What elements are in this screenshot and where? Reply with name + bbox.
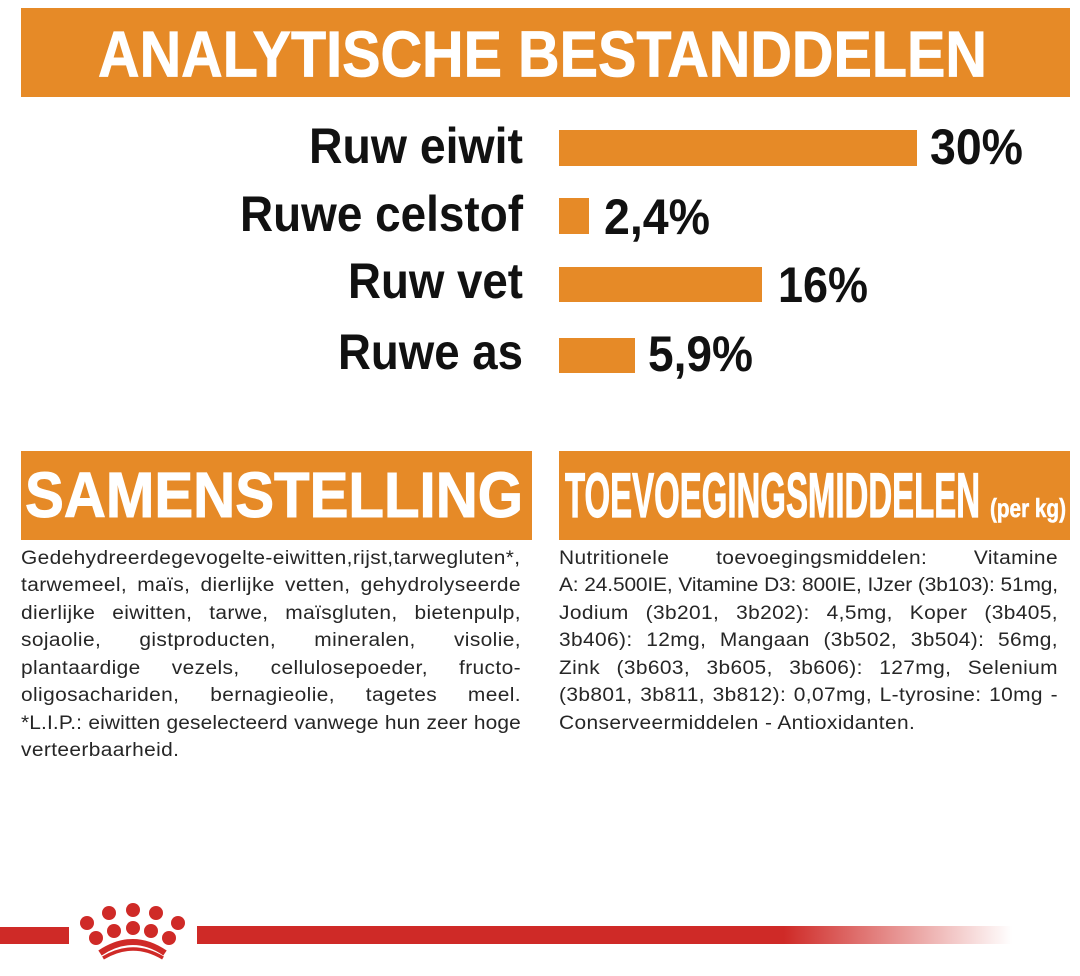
text block: additives: (3b801, 3b811, 3b812): 0,07mg, L-tyrosine: 10mg - — [559, 685, 1058, 706]
text block: composition: oligosachariden, bernagieolie, tagetes meel. — [21, 685, 521, 706]
text block: composition — [21, 548, 521, 761]
footer red line: right, fading out — [197, 926, 1012, 944]
text block: composition: tarwemeel, maïs, dierlijke vetten, gehydrolyseerde — [21, 575, 521, 596]
row: Ruwe celstof 2,4%: 2,4% — [604, 189, 710, 245]
heading: Samenstelling: SAMENSTELLING — [25, 459, 523, 531]
row: Ruwe as 5,9% — [338, 324, 753, 382]
text block: composition: Gedehydreerdegevogelte-eiwitten,rijst,tarwegluten*, — [21, 548, 520, 569]
text block: additives: Nutritionele toevoegingsmiddelen: Vitamine — [559, 548, 1058, 569]
row: Ruw eiwit 30%: Ruw eiwit — [309, 118, 523, 174]
row: Ruwe celstof 2,4% — [240, 186, 710, 245]
text block: composition: sojaolie, gistproducten, mineralen, visolie, — [21, 630, 521, 651]
text block: additives: Conserveermiddelen - Antioxidanten. — [559, 713, 915, 734]
bar chart: analytical constituents — [240, 118, 1023, 382]
text block: additives: 3b406): 12mg, Mangaan (3b502, 3b504): 56mg, — [559, 630, 1058, 651]
title banner: ANALYTISCHE BESTANDDELEN — [98, 18, 987, 90]
row: Ruw vet 16%: 16% — [778, 257, 868, 313]
row: Ruwe as 5,9%: 5,9% — [648, 326, 753, 382]
footer red line: left — [0, 927, 69, 944]
icon: Royal Canin crown logo — [80, 903, 185, 958]
row: Ruw eiwit 30%: 30% — [930, 119, 1023, 175]
text block: additives: Zink (3b603, 3b605, 3b606): 127mg, Selenium — [559, 658, 1058, 679]
row: Ruw eiwit 30% — [309, 118, 1023, 175]
text block: additives: A: 24.500IE, Vitamine D3: 800IE, IJzer (3b103): 51mg, — [559, 575, 1058, 596]
text block: composition: *L.I.P.: eiwitten geselecteerd vanwege hun zeer hoge — [21, 713, 521, 734]
row: Ruwe as 5,9%: Ruwe as — [338, 324, 523, 380]
row: Ruw vet 16%: Ruw vet — [348, 253, 523, 309]
text block: composition: verteerbaarheid. — [21, 740, 179, 761]
row: Ruwe celstof 2,4%: Ruwe celstof — [240, 186, 523, 242]
text block: additives: Jodium (3b201, 3b202): 4,5mg, Koper (3b405, — [559, 603, 1058, 624]
row: Ruw vet 16% — [348, 253, 868, 313]
text block: composition: plantaardige vezels, cellulosepoeder, fructo- — [21, 658, 521, 679]
text block: composition: dierlijke eiwitten, tarwe, maïsgluten, bietenpulp, — [21, 603, 521, 624]
text block: additives — [559, 548, 1058, 734]
